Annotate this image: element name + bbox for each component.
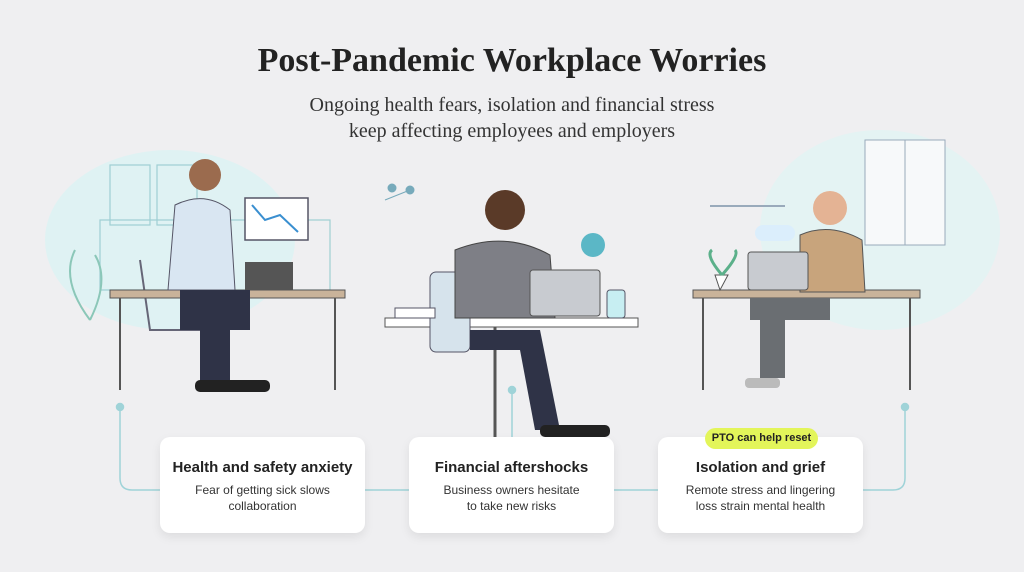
card: isolation: Isolation and grief: [696, 459, 825, 476]
card: health: collaboration: [228, 499, 297, 513]
card: health: [160, 437, 365, 533]
card: health: Fear of getting sick slows: [195, 483, 330, 497]
connector lines: [116, 386, 908, 490]
card: financial: [409, 437, 614, 533]
card: health: Health and safety anxiety: [172, 459, 353, 476]
card: isolation: [658, 437, 863, 533]
scene: right worker: [693, 130, 1000, 390]
card: financial: to take new risks: [467, 499, 556, 513]
scene: middle worker: [385, 184, 638, 437]
card: isolation: Remote stress and lingering: [686, 483, 835, 497]
plant: [70, 250, 101, 320]
title: Post-Pandemic Workplace Worries: [258, 42, 766, 79]
subtitle: keep affecting employees and employers: [349, 120, 675, 142]
subtitle: Ongoing health fears, isolation and financial stress: [310, 94, 714, 116]
scene: left worker: [45, 150, 345, 392]
card: financial: Financial aftershocks: [435, 459, 588, 476]
card: financial: Business owners hesitate: [443, 483, 580, 497]
chair: [140, 260, 205, 330]
badge: [705, 428, 818, 449]
badge: PTO can help reset: [712, 432, 811, 444]
card: isolation: loss strain mental health: [696, 499, 825, 513]
subtitle: [310, 94, 714, 142]
